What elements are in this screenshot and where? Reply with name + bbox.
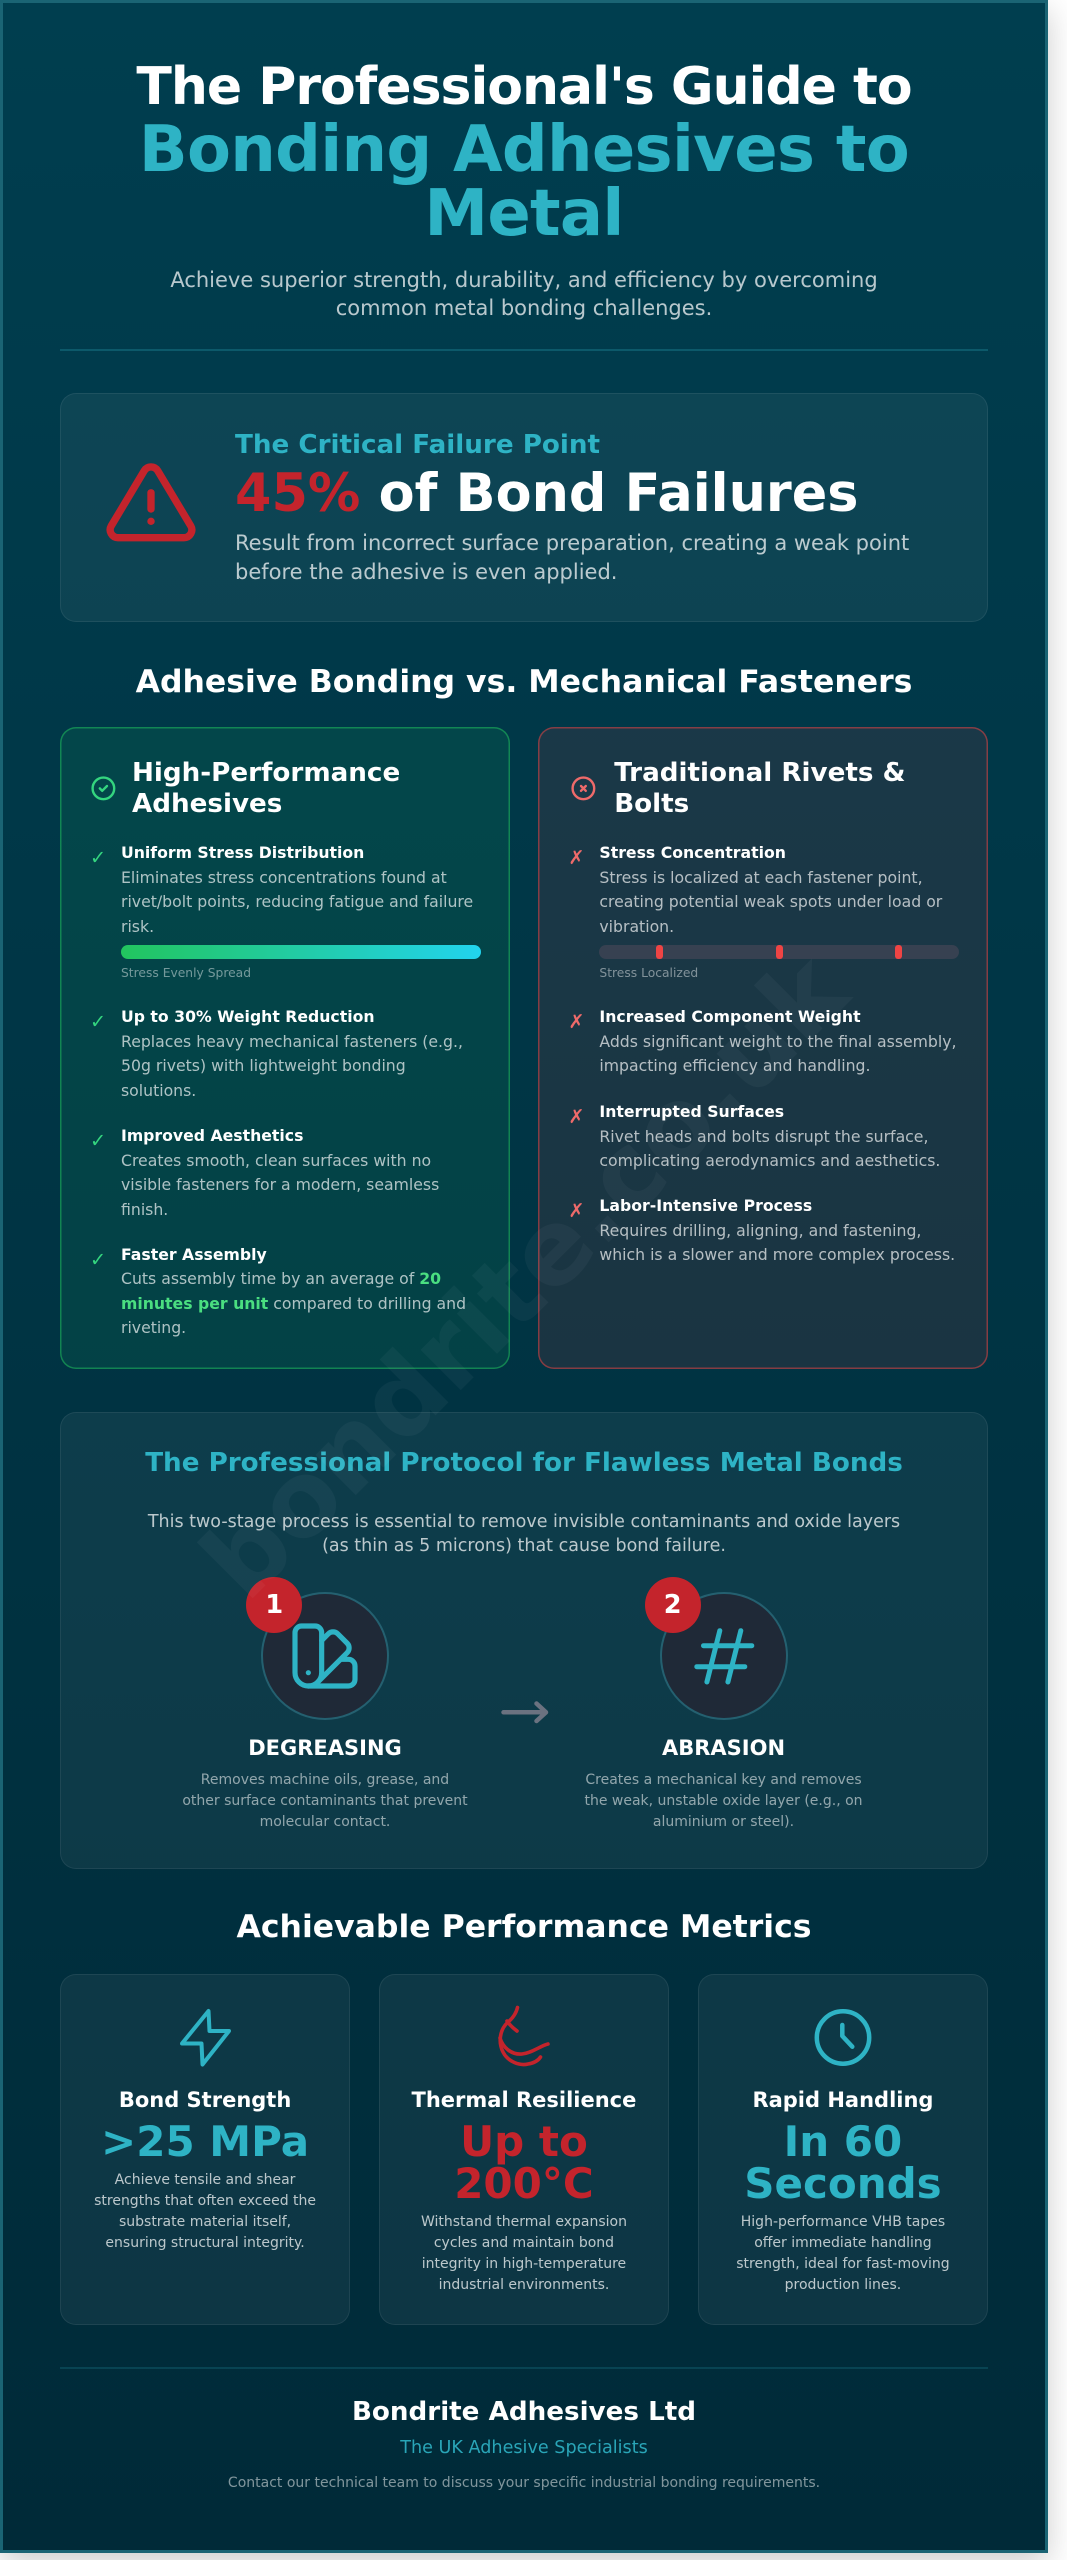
item text <box>599 843 942 936</box>
panel heading: Bolts <box>614 789 689 819</box>
item text: 50g rivets) with lightweight bonding <box>121 1056 406 1075</box>
panel heading: The Professional Protocol for Flawless Metal Bonds <box>145 1448 903 1478</box>
icon: warning triangle <box>106 463 196 542</box>
title <box>136 56 912 251</box>
item text: Requires drilling, aligning, and fastening, <box>599 1221 921 1240</box>
callout description <box>235 531 909 584</box>
metric card: rapid handling <box>698 1974 988 2325</box>
item text <box>121 843 473 936</box>
icon: bolt <box>180 2008 231 2067</box>
panel: traditional rivets and bolts <box>538 727 988 1369</box>
panel: professional protocol <box>60 1412 988 1869</box>
step number <box>645 1577 701 1633</box>
metric value: >25 MPa <box>101 2117 309 2166</box>
item text: Increased Component Weight <box>599 1007 861 1026</box>
watermark: bondrite.co.uk <box>178 930 870 1622</box>
panel heading <box>614 758 905 819</box>
headline statistic: 45% of Bond Failures <box>235 463 858 524</box>
stress bar: localized <box>599 945 959 959</box>
title: Bonding Adhesives to <box>139 113 909 187</box>
item text: visible fasteners for a modern, seamless <box>121 1175 439 1194</box>
metric description <box>94 2172 316 2251</box>
protocol description <box>148 1512 900 1556</box>
heading: performance metrics: Achievable Performance Metrics <box>236 1909 812 1945</box>
item text <box>121 1007 463 1100</box>
metric value <box>454 2117 594 2208</box>
icon: circle check <box>91 776 116 800</box>
item: stress concentration <box>568 843 959 980</box>
check mark: ✓ <box>90 1010 106 1033</box>
item text: Stress Concentration <box>599 843 786 862</box>
icon: hash <box>694 1628 754 1684</box>
step title: DEGREASING <box>248 1736 402 1760</box>
footer <box>0 2395 1048 2495</box>
item: uniform stress distribution <box>90 843 481 980</box>
step description: the weak, unstable oxide layer (e.g., on <box>584 1792 863 1808</box>
item text <box>599 1007 957 1075</box>
company name: Bondrite Adhesives Ltd <box>352 2397 696 2427</box>
item text: Labor-Intensive Process <box>599 1196 812 1215</box>
metric value: In 60 <box>784 2117 902 2166</box>
panel heading: Adhesives <box>132 789 282 819</box>
stress bar: even <box>121 945 481 959</box>
metric value: 200°C <box>454 2159 594 2208</box>
icon circle <box>660 1592 788 1720</box>
metric title: Rapid Handling <box>752 2088 933 2112</box>
step number <box>246 1577 302 1633</box>
item text: Interrupted Surfaces <box>599 1102 784 1121</box>
panel heading: High-Performance <box>132 758 400 788</box>
item text: complicating aerodynamics and aesthetics. <box>599 1151 940 1170</box>
subtitle <box>170 268 878 320</box>
contact note: Contact our technical team to discuss your specific industrial bonding requirements. <box>228 2475 820 2491</box>
item text <box>599 1102 940 1170</box>
item text: Faster Assembly <box>121 1245 267 1264</box>
item text: Replaces heavy mechanical fasteners (e.g., <box>121 1032 463 1051</box>
metric description: substrate material itself, <box>119 2214 291 2230</box>
metric description: cycles and maintain bond <box>434 2235 614 2251</box>
metric value: Seconds <box>744 2159 942 2208</box>
heading: comparison: Adhesive Bonding vs. Mechanical Fasteners <box>136 664 912 700</box>
metric description: strength, ideal for fast-moving <box>736 2256 950 2272</box>
cross mark: ✗ <box>568 846 584 869</box>
metric description: High-performance VHB tapes <box>741 2214 945 2230</box>
item text: Up to 30% Weight Reduction <box>121 1007 375 1026</box>
item text: solutions. <box>121 1081 196 1100</box>
item text: riveting. <box>121 1318 186 1337</box>
panel heading <box>132 758 400 819</box>
callout heading: The Critical Failure Point <box>235 430 600 460</box>
title: The Professional's Guide to <box>136 56 912 116</box>
cross mark: ✗ <box>568 1010 584 1033</box>
panel: critical failure point <box>60 393 988 622</box>
metric description: integrity in high-temperature <box>422 2256 626 2272</box>
callout description: Result from incorrect surface preparation, creating a weak point <box>235 531 909 555</box>
icon: flame <box>498 2006 550 2066</box>
item text: Cuts assembly time by an average of 20 <box>121 1269 441 1288</box>
protocol description: (as thin as 5 microns) that cause bond failure. <box>322 1536 726 1556</box>
item text <box>599 1196 955 1264</box>
bar label: Stress Localized <box>599 966 698 980</box>
subtitle: common metal bonding challenges. <box>336 296 712 320</box>
step number: 1 <box>265 1590 283 1620</box>
item: weight reduction <box>90 1007 463 1100</box>
metric title: Bond Strength <box>119 2088 291 2112</box>
subtitle: Achieve superior strength, durability, and efficiency by overcoming <box>170 268 878 292</box>
metric card: bond strength <box>60 1974 350 2325</box>
step number: 2 <box>664 1590 682 1620</box>
icon: clock <box>814 2009 872 2066</box>
title: Metal <box>424 177 624 251</box>
metric description: production lines. <box>785 2277 901 2293</box>
item: component weight <box>568 1007 957 1075</box>
item: aesthetics <box>90 1126 439 1218</box>
item: labor-intensive process <box>568 1196 955 1264</box>
bar label: Stress Evenly Spread <box>121 966 251 980</box>
tagline: The UK Adhesive Specialists <box>400 2438 648 2458</box>
check mark: ✓ <box>90 1129 106 1152</box>
panel heading: Traditional Rivets & <box>614 758 905 788</box>
step description <box>182 1772 468 1830</box>
metric description: strengths that often exceed the <box>94 2193 316 2209</box>
item text: creating potential weak spots under load or <box>599 892 942 911</box>
step 1: degreasing <box>182 1577 468 1830</box>
item: faster assembly <box>90 1245 466 1337</box>
item text <box>121 1245 466 1337</box>
icon: circle x <box>571 776 596 800</box>
cross mark: ✗ <box>568 1199 584 1222</box>
icon circle <box>261 1592 389 1720</box>
item text <box>121 1126 439 1218</box>
callout description: before the adhesive is even applied. <box>235 560 617 584</box>
step 2: abrasion <box>584 1577 863 1830</box>
item text: Rivet heads and bolts disrupt the surface, <box>599 1126 928 1146</box>
step description: aluminium or steel). <box>653 1814 794 1830</box>
item: interrupted surfaces <box>568 1102 940 1170</box>
item text: vibration. <box>599 917 674 936</box>
item text: which is a slower and more complex process. <box>599 1245 955 1264</box>
metric value <box>744 2117 942 2208</box>
metric description <box>421 2214 627 2293</box>
metric description: Withstand thermal expansion <box>421 2214 627 2230</box>
metric description: offer immediate handling <box>754 2235 932 2251</box>
item text: Uniform Stress Distribution <box>121 843 364 862</box>
item text: Improved Aesthetics <box>121 1126 303 1145</box>
metric description: Achieve tensile and shear <box>115 2172 295 2188</box>
item text: rivet/bolt points, reducing fatigue and failure <box>121 892 473 911</box>
check mark: ✓ <box>90 1248 106 1271</box>
cross mark: ✗ <box>568 1105 584 1128</box>
metric description: ensuring structural integrity. <box>105 2235 305 2251</box>
step description: other surface contaminants that prevent <box>182 1792 468 1808</box>
arrow <box>501 1701 548 1724</box>
item text: minutes per unit compared to drilling and <box>121 1294 466 1313</box>
item text: Eliminates stress concentrations found at <box>121 868 447 887</box>
metric value: Up to <box>460 2117 588 2166</box>
step description: molecular contact. <box>260 1814 390 1830</box>
metric description: industrial environments. <box>439 2277 609 2293</box>
step title: ABRASION <box>662 1736 785 1760</box>
check mark: ✓ <box>90 846 106 869</box>
metric card: thermal resilience <box>379 1974 669 2325</box>
item text: risk. <box>121 917 154 936</box>
step description <box>584 1772 863 1830</box>
item text: Adds significant weight to the final assembly, <box>599 1032 957 1051</box>
icon: swatch <box>292 1623 358 1689</box>
step description: Creates a mechanical key and removes <box>585 1772 862 1788</box>
item text: Creates smooth, clean surfaces with no <box>121 1150 431 1170</box>
item text: finish. <box>121 1200 168 1218</box>
item text: impacting efficiency and handling. <box>599 1056 870 1075</box>
protocol description: This two-stage process is essential to remove invisible contaminants and oxide layers <box>148 1512 900 1532</box>
metric description <box>698 2212 988 2296</box>
step description: Removes machine oils, grease, and <box>201 1772 449 1788</box>
metric title: Thermal Resilience <box>412 2088 636 2112</box>
panel: high-performance adhesives <box>60 727 510 1369</box>
item text: Stress is localized at each fastener point, <box>599 868 923 887</box>
